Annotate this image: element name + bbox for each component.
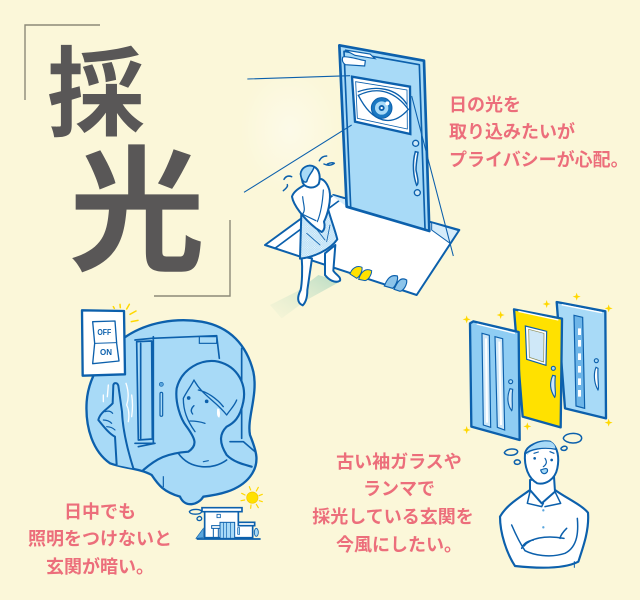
sweat drops [283, 156, 334, 191]
text: modernize transom [312, 452, 474, 555]
man [270, 156, 340, 318]
door window with eye [352, 77, 410, 134]
text: dark entrance: 照明をつけないと [28, 529, 172, 549]
door: middle yellow [514, 309, 562, 427]
light switch: ON [100, 348, 112, 357]
heading: title brackets and kanji: 光 [69, 137, 205, 289]
floor [265, 195, 459, 295]
heading: title brackets and kanji: 採 [47, 39, 145, 149]
small thought bubbles [189, 509, 202, 521]
text: dark entrance: 日中でも [64, 502, 136, 522]
text: modernize transom: 今風にしたい。 [336, 534, 462, 555]
illustration: man imagining three doors [463, 293, 613, 568]
text: privacy concern: 取り込みたいが [449, 121, 575, 142]
man with crossed arms [500, 441, 588, 568]
sparkles [463, 293, 613, 434]
thought bubbles [504, 433, 582, 464]
text: modernize transom: 古い袖ガラスや [336, 452, 462, 472]
door [339, 45, 429, 231]
hand pointing at switch [98, 383, 133, 468]
house and sun [196, 487, 262, 539]
text: modernize transom: ランマで [363, 479, 435, 499]
woman [143, 361, 252, 487]
text: privacy concern [449, 95, 629, 170]
text: dark entrance: 玄関が暗い。 [46, 556, 154, 577]
head [301, 166, 320, 187]
text: privacy concern: 日の光を [449, 95, 521, 115]
heading: title brackets and kanji [25, 25, 230, 296]
illustration: man in towel at glass door [240, 45, 459, 318]
door: right blue [557, 302, 606, 418]
light switch [82, 310, 125, 376]
torso and arms [292, 179, 330, 232]
legs [298, 257, 312, 305]
thought bubble [86, 320, 256, 504]
light switch: OFF [97, 328, 111, 337]
shoes [350, 267, 407, 291]
text: dark entrance [28, 502, 172, 577]
door: left blue [470, 321, 520, 440]
collar and crossed arms [512, 492, 578, 556]
illustration: dark entrance thought bubble [82, 304, 262, 539]
door handle [413, 140, 420, 196]
towel [300, 210, 337, 259]
text: modernize transom: 採光している玄関を [312, 507, 474, 527]
sight lines [244, 76, 453, 256]
text: privacy concern: プライバシーが心配。 [449, 149, 629, 170]
